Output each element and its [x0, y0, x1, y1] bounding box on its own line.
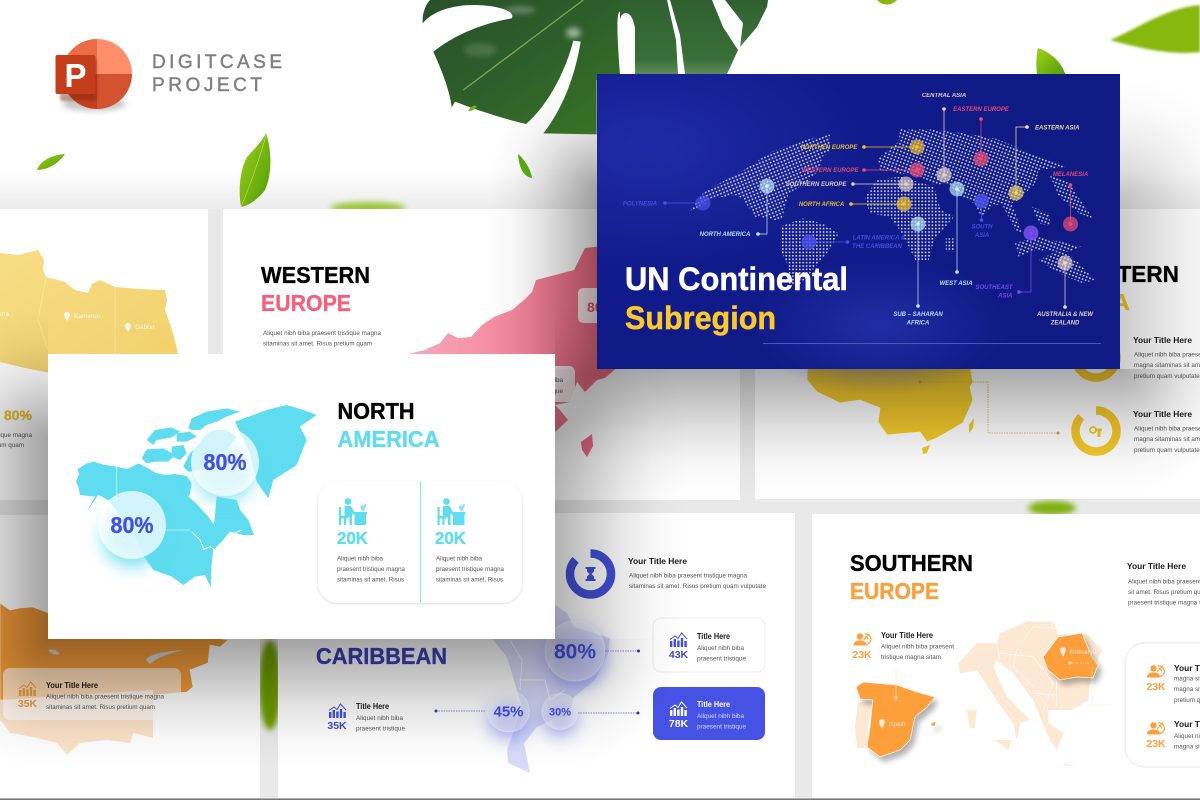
value: 23K: [1146, 738, 1166, 750]
card: lower stat: biba: [551, 377, 563, 384]
map borders: [997, 627, 1057, 710]
bubble: 30%: 30%: [549, 706, 571, 718]
map: portugal: [855, 702, 872, 748]
icon: bars: [329, 704, 346, 718]
map: orange region: [0, 603, 228, 700]
bubble: top 80%: [191, 428, 259, 496]
leaf: small behind blue slide: [1036, 48, 1066, 76]
icon: bar chart: [19, 682, 36, 696]
region labels: SOUTHEAST: [975, 285, 1014, 291]
bottom edge line: [0, 798, 1200, 800]
midrib: [463, 0, 583, 90]
region labels: ASIA: [997, 294, 1012, 300]
value: 20K: [435, 528, 466, 548]
monstera lobes right: [620, 0, 768, 74]
value: 23K: [1146, 681, 1166, 693]
region labels: SUB – SAHARAN: [893, 312, 943, 318]
value: 23K: [852, 649, 872, 661]
label: Kamerun pin: Kamerun: [74, 313, 101, 320]
leaf: top sliver: [877, 0, 897, 5]
text: upper item: Your Title Here: [1133, 335, 1192, 345]
region labels: NORTHEN EUROPE: [801, 145, 858, 151]
text: upper item: [1133, 335, 1200, 380]
text: sitaminas sit amet. Risus: [337, 576, 404, 584]
stat: left 23K: [852, 630, 954, 661]
text: top item: [628, 556, 766, 590]
chart: hourglass donut: [570, 554, 611, 594]
background glow: [750, 255, 1010, 395]
card: percentage stat: [578, 288, 638, 323]
card: lower stat: tristique: [541, 388, 563, 395]
stat value: 35K: [18, 698, 38, 710]
leaf highlights: [463, 6, 581, 57]
icon: target: [1147, 722, 1164, 734]
panel: russia slide: [0, 515, 260, 798]
chart: upper donut: [1076, 336, 1116, 378]
map: arctic islands: [142, 408, 240, 527]
card: right stats: [1125, 643, 1200, 767]
connectors: [436, 651, 638, 713]
bubble: 80%: [545, 621, 605, 681]
map: eastern asia: [807, 350, 973, 442]
title: Subregion: [625, 300, 776, 336]
heading: SOUTHERN: [850, 550, 973, 576]
map: pale region: [0, 690, 153, 755]
text: upper item: pretium quam vulputate: [1134, 373, 1200, 380]
title rule: [763, 342, 1101, 345]
blurred leaf between slides: [259, 640, 281, 730]
text: top right item: Your Title Here: [1127, 561, 1186, 571]
country borders: [38, 277, 115, 360]
text: tristique magna sitam: [881, 654, 941, 661]
heading: [850, 550, 973, 604]
leaf: small left: [37, 154, 65, 170]
divider: [420, 481, 421, 603]
map: yellow countries: [0, 250, 180, 380]
bubble: 80%: 80%: [554, 640, 596, 664]
text: top item: Your Title Here: [628, 556, 687, 566]
text: Aliquet nibh biba: [697, 713, 744, 720]
map: island: [581, 434, 593, 457]
text: praesent tristique: [697, 724, 746, 730]
region labels: POLYNESIA: [623, 202, 657, 208]
icon: person at desk: [438, 498, 466, 525]
text: sitaminas sit amet. Risus: [436, 576, 503, 584]
logo tile shadow: [60, 59, 97, 101]
icon: target: [1147, 665, 1164, 678]
region labels: SOUTH: [972, 224, 993, 230]
logo tile: [56, 55, 96, 94]
panel: north america slide: [48, 354, 555, 639]
text: praesent tristique: [697, 656, 746, 662]
logo circle quarters: [62, 39, 132, 109]
icon: bars: [670, 702, 687, 716]
region labels: AFRICA: [906, 320, 929, 326]
panel: latin america and caribbean slide: [278, 513, 795, 798]
heading: [1071, 261, 1179, 315]
map: hudson bay: [188, 492, 216, 524]
body text: sitaminas sit amet. Risus pretium quam: [263, 340, 372, 348]
text: Aliquet nibh biba: [697, 645, 744, 652]
value: 20K: [337, 528, 368, 548]
title: [625, 261, 848, 336]
romania shape: [1043, 633, 1098, 680]
glow: top bubble: [195, 442, 255, 502]
marker: spain: [879, 669, 906, 729]
heading: ASIA: [1071, 289, 1130, 315]
text: top right item: [1127, 561, 1200, 606]
label: Gabon pin: [125, 323, 155, 332]
connector dots: [434, 650, 640, 714]
title: UN Continental: [625, 261, 848, 297]
connector lines: [665, 109, 1070, 307]
heading: EUROPE: [850, 578, 939, 604]
dots: south america and africa: [780, 176, 954, 286]
text: lower item: pretium quam vulputate: [1134, 447, 1200, 454]
map borders: [510, 640, 565, 700]
region labels: LATIN AMERICA &: [853, 236, 905, 242]
leaf: monstera: [423, 0, 768, 134]
gutter background: [0, 209, 1200, 800]
shadow: blue slide: [472, 75, 1200, 494]
map: pale central europe: [958, 622, 1102, 767]
card: 80% stat: [0, 375, 46, 465]
map: romania: [1043, 633, 1102, 685]
marker: romania: Romania: [1070, 649, 1096, 656]
blurred leaf behind the top row: [330, 202, 406, 214]
logo: powerpoint: [56, 39, 132, 111]
map: lakes: [48, 650, 184, 664]
region labels: NORTH AFRICA: [799, 202, 844, 208]
bubble: top 80%: 80%: [204, 449, 246, 475]
brand name: [152, 52, 282, 96]
value: 78K: [669, 718, 689, 730]
bubble: 45%: 45%: [493, 704, 524, 720]
brand name: DIGITCASE: [152, 52, 282, 73]
leaf: central: [240, 133, 270, 207]
heading: [261, 262, 370, 316]
bubble: bottom 80%: 80%: [110, 512, 154, 538]
heading: EASTERN: [1071, 261, 1179, 287]
map: spain: [856, 682, 940, 762]
card: 78K highlighted: [653, 687, 765, 740]
glow: bubbles: [488, 628, 607, 740]
chart: lower donut: [1076, 410, 1116, 452]
text: Aliquet nibh biba praesent: [881, 644, 954, 650]
heading: [338, 398, 440, 452]
heading: EUROPE: [261, 290, 351, 316]
text: praesent tristique magna: [436, 566, 504, 573]
logo letter: P: [64, 57, 87, 94]
region labels: NORTH AMERICA: [700, 232, 750, 238]
text: praesent tristique magna: [337, 566, 405, 573]
spain shape: [856, 682, 936, 757]
region labels: EASTERN ASIA: [1035, 126, 1079, 132]
map lines: [117, 467, 190, 530]
region labels: WEST ASIA: [939, 281, 973, 287]
text: Aliquet nibh biba: [337, 556, 383, 562]
card: 43K: [653, 618, 765, 672]
text: praesent tristique: [356, 726, 405, 732]
body text: Aliquet nibh biba praesent tristique magna: [263, 330, 381, 337]
region labels: ASIA: [974, 233, 989, 239]
connector: [1070, 663, 1113, 705]
bubble: 45%: [488, 690, 530, 732]
map: western europe: [408, 245, 640, 432]
region labels: [623, 93, 1094, 326]
connector: [920, 382, 1058, 433]
title: Title Here: [697, 700, 731, 709]
leaf: small falling: [518, 154, 532, 178]
icon: bars: [670, 633, 687, 647]
label: Kamerun pin: [64, 312, 101, 321]
glow: bottom bubble: [102, 507, 162, 567]
card body: [318, 481, 522, 603]
card: 35K stat: [3, 668, 181, 720]
map: north america: [76, 405, 317, 587]
region labels: CENTRAL ASIA: [922, 93, 966, 99]
title: Title Here: [697, 631, 730, 641]
heading: WESTERN: [261, 262, 370, 288]
title: Title Here: [356, 701, 389, 711]
text: Aliquet nibh biba: [436, 556, 482, 562]
card: lower stat: [480, 366, 575, 402]
region labels: AUSTRALIA & NEW: [1036, 312, 1094, 318]
text: Aliquet nibh biba: [356, 715, 403, 722]
soft band above the slides: [0, 170, 1200, 209]
blurred leaf in gutter: [1028, 501, 1076, 515]
leaf: tiny sliver: [468, 106, 477, 111]
brand name: PROJECT: [152, 75, 262, 96]
value: 43K: [669, 649, 689, 661]
region labels: THE CARIBBEAN: [852, 244, 902, 250]
icon: person at desk: [339, 498, 367, 525]
map: great lakes and coast: [192, 530, 242, 550]
shadow: north america slide: [0, 300, 685, 769]
panel: western europe slide: [223, 209, 740, 500]
card: percentage stat: 80%: [587, 299, 616, 315]
bubble: 30%: [542, 694, 578, 730]
heading: NORTH: [338, 398, 414, 424]
panel: eastern asia slide: [755, 209, 1200, 499]
text: top item: sitaminas sit amet. Risus pretium quam vulputate: [629, 583, 766, 590]
marker: spain: Spain: [889, 721, 906, 728]
end dots: [663, 107, 1072, 309]
panel: central africa slide: [0, 209, 208, 500]
region nodes: [696, 140, 1078, 270]
label: Gabon pin: Gabon: [135, 324, 155, 331]
stat value: 80%: [4, 407, 33, 423]
bubble: bottom 80%: [98, 491, 166, 559]
dotted world map: [690, 129, 1094, 286]
card text: sitaminas sit amet. Risus pretium quam: [46, 704, 155, 711]
panel: un continental subregion slide: [597, 74, 1120, 395]
marker: romania: [1060, 647, 1096, 664]
map: greenland: [235, 405, 317, 498]
map: islands: [922, 418, 974, 454]
region labels: EASTERN EUROPE: [953, 107, 1010, 113]
card title: Your Title Here: [46, 680, 98, 690]
map: south america: [480, 605, 610, 773]
card: 35K: [312, 690, 424, 742]
text: lower item: Your Title Here: [1133, 409, 1192, 419]
value: 35K: [327, 720, 347, 732]
text: lower item: [1133, 409, 1200, 454]
region labels: ZEALAND: [1050, 320, 1080, 326]
panel: southern europe slide: [812, 514, 1200, 798]
connector dots: [918, 380, 1060, 434]
region labels: MELANESIA: [1053, 172, 1088, 178]
card text: Aliquet nibh biba praesent tristique magna: [46, 694, 164, 700]
card: stats: [318, 481, 522, 604]
heading: AMERICA: [338, 426, 440, 452]
dots: eurasia and oceania: [878, 129, 1094, 283]
title: Your Title Here: [881, 630, 933, 640]
region labels: WESTERN EUROPE: [801, 168, 859, 174]
heading: CARIBBEAN: [316, 643, 447, 669]
region labels: SOUTHERN EUROPE: [786, 182, 847, 188]
leaf: top right blurred: [1110, 5, 1200, 53]
text: top item: Aliquet nibh biba praesent tristique magna: [629, 572, 747, 580]
